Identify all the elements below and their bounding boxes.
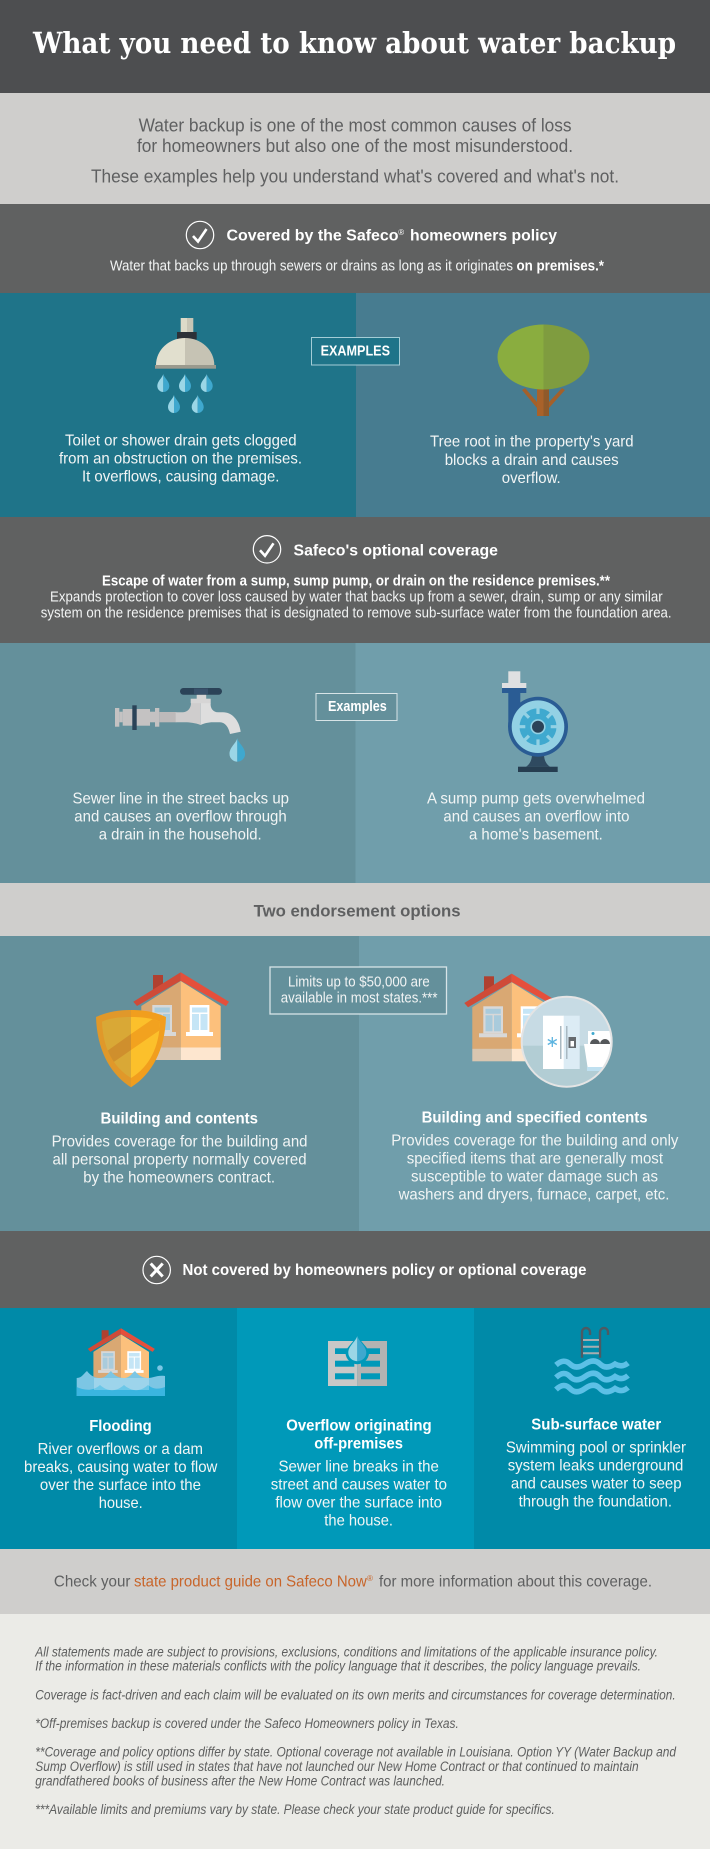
disclaimer text: Sump Overflow) is still used in states that have not launched our New Home Contract or that continued to maintain — [35, 1759, 639, 1774]
disclaimer text: grandfathered books of business after the New Home Contract was launched. — [35, 1773, 445, 1788]
disclaimer text: ***Available limits and premiums vary by state. Please check your state product guide for specifics. — [35, 1802, 555, 1817]
overflow off-premises text: Sewer line breaks in the — [278, 1459, 439, 1476]
shower text: Toilet or shower drain gets clogged — [65, 433, 297, 450]
sump pump text: A sump pump gets overwhelmed — [427, 791, 645, 808]
guide text: ® — [367, 1574, 373, 1583]
optional coverage description: Escape of water from a sump, sump pump, or drain on the residence premises.** — [102, 574, 610, 590]
panel: footnotes — [0, 1614, 710, 1849]
icon: flooded house — [77, 1328, 165, 1396]
icon: grate with water drop — [328, 1334, 387, 1386]
icon: house with appliances — [464, 974, 615, 1088]
flooding text — [24, 1418, 218, 1512]
panel: check your guide — [0, 1549, 710, 1614]
shower text: from an obstruction on the premises. — [59, 451, 302, 468]
icon: pool ladder and water — [556, 1328, 628, 1392]
flooding text: Flooding — [89, 1418, 152, 1435]
heading: covered: homeowners policy — [410, 228, 557, 245]
building and contents text: by the homeowners contract. — [83, 1169, 275, 1186]
sub-surface water text — [506, 1417, 687, 1511]
icon: x circle — [143, 1256, 170, 1284]
icon: sump pump — [502, 671, 568, 772]
panel: optional coverage examples — [0, 643, 710, 883]
intro text — [91, 115, 619, 187]
building and specified contents text — [391, 1109, 678, 1203]
examples label: EXAMPLES — [321, 344, 390, 360]
optional coverage description: Expands protection to cover loss caused by water that backs up from a sewer, drain, sump or any similar — [50, 590, 663, 606]
sump pump text: and causes an overflow into — [443, 809, 630, 826]
panel: covered header — [0, 204, 710, 293]
panel: two endorsement options heading — [0, 883, 710, 936]
guide text: for more information about this coverage. — [379, 1574, 652, 1591]
building and specified contents text: susceptible to water damage such as — [411, 1168, 658, 1185]
panel: not covered header — [0, 1231, 710, 1308]
icon: shower head — [155, 318, 216, 413]
heading: not covered: Not covered by homeowners policy or optional coverage — [182, 1262, 587, 1279]
guide text: state product guide on Safeco Now — [134, 1574, 367, 1591]
faucet text — [72, 791, 289, 844]
sub-surface water text: system leaks underground — [508, 1458, 683, 1475]
tree text: blocks a drain and causes — [445, 452, 619, 469]
building and specified contents text: Provides coverage for the building and only — [391, 1132, 678, 1149]
examples label: Examples — [328, 699, 387, 715]
heading: endorsement options: Two endorsement options — [254, 903, 461, 921]
sump pump text — [427, 791, 645, 844]
faucet text: a drain in the household. — [99, 827, 262, 844]
overflow off-premises text — [271, 1418, 447, 1530]
panel: endorsement options — [0, 936, 710, 1231]
title band — [0, 0, 710, 93]
sub-surface water text: and causes water to seep — [511, 1476, 682, 1493]
flooding text: River overflows or a dam — [38, 1441, 203, 1458]
disclaimer text — [34, 1645, 676, 1817]
limits callout: Limits up to $50,000 are — [288, 975, 430, 991]
disclaimer text: *Off-premises backup is covered under the Safeco Homeowners policy in Texas. — [35, 1716, 459, 1731]
intro text: for homeowners but also one of the most misunderstood. — [137, 135, 573, 156]
overflow off-premises text: Overflow originating — [286, 1418, 432, 1435]
disclaimer text: If the information in these materials conflicts with the policy language that it describes, the policy language prevails. — [35, 1659, 641, 1674]
flooding text: over the surface into the — [40, 1477, 201, 1494]
examples label — [316, 694, 397, 720]
icon: check circle — [186, 221, 214, 249]
building and contents text — [52, 1110, 307, 1186]
sub-surface water text: Swimming pool or sprinkler — [506, 1440, 687, 1457]
faucet text: and causes an overflow through — [74, 809, 287, 826]
tree text: overflow. — [502, 470, 561, 487]
heading: covered: ® — [398, 228, 404, 237]
guide text — [54, 1574, 652, 1591]
intro text: Water backup is one of the most common causes of loss — [139, 115, 572, 136]
guide text: Check your — [54, 1574, 131, 1591]
panel: intro — [0, 93, 710, 204]
panel: optional coverage header — [0, 517, 710, 643]
building and specified contents text: Building and specified contents — [422, 1109, 648, 1126]
overflow off-premises text: flow over the surface into — [275, 1495, 442, 1512]
panel: covered examples — [0, 293, 710, 517]
sump pump text: a home's basement. — [469, 827, 603, 844]
icon: tree — [498, 324, 590, 416]
covered description: Water that backs up through sewers or drains as long as it originates — [110, 259, 513, 275]
heading: covered: Covered by the Safeco — [226, 228, 399, 245]
heading: covered — [226, 228, 557, 245]
overflow off-premises text: street and causes water to — [271, 1477, 447, 1494]
shower text: It overflows, causing damage. — [82, 469, 279, 486]
sub-surface water text: Sub-surface water — [531, 1417, 661, 1434]
overflow off-premises text: off-premises — [314, 1436, 403, 1453]
limits callout — [270, 967, 446, 1014]
panel: not covered examples — [0, 1308, 710, 1549]
sub-surface water text: through the foundation. — [519, 1494, 672, 1511]
icon: faucet — [115, 688, 245, 762]
covered description: on premises.* — [516, 259, 604, 275]
flooding text: house. — [99, 1495, 143, 1512]
flooding text: breaks, causing water to flow — [24, 1459, 218, 1476]
heading: optional coverage: Safeco's optional coverage — [294, 543, 498, 560]
faucet text: Sewer line in the street backs up — [72, 791, 289, 808]
icon: house with shield — [96, 972, 229, 1087]
building and specified contents text: specified items that are generally most — [407, 1150, 664, 1167]
tree text: Tree root in the property's yard — [430, 434, 634, 451]
tree text — [430, 434, 634, 487]
overflow off-premises text: the house. — [324, 1513, 393, 1530]
intro text: These examples help you understand what's covered and what's not. — [91, 166, 619, 187]
optional coverage description: system on the residence premises that is designated to remove sub-surface water from the foundation area. — [41, 605, 672, 621]
icon: check circle — [253, 536, 281, 563]
examples label — [312, 338, 400, 365]
building and contents text: all personal property normally covered — [52, 1151, 307, 1168]
building and contents text: Building and contents — [100, 1110, 258, 1127]
building and contents text: Provides coverage for the building and — [52, 1133, 307, 1150]
optional coverage description — [41, 574, 672, 621]
building and specified contents text: washers and dryers, furnace, carpet, etc. — [398, 1186, 669, 1203]
shower text — [59, 433, 302, 486]
limits callout: available in most states.*** — [281, 990, 438, 1006]
